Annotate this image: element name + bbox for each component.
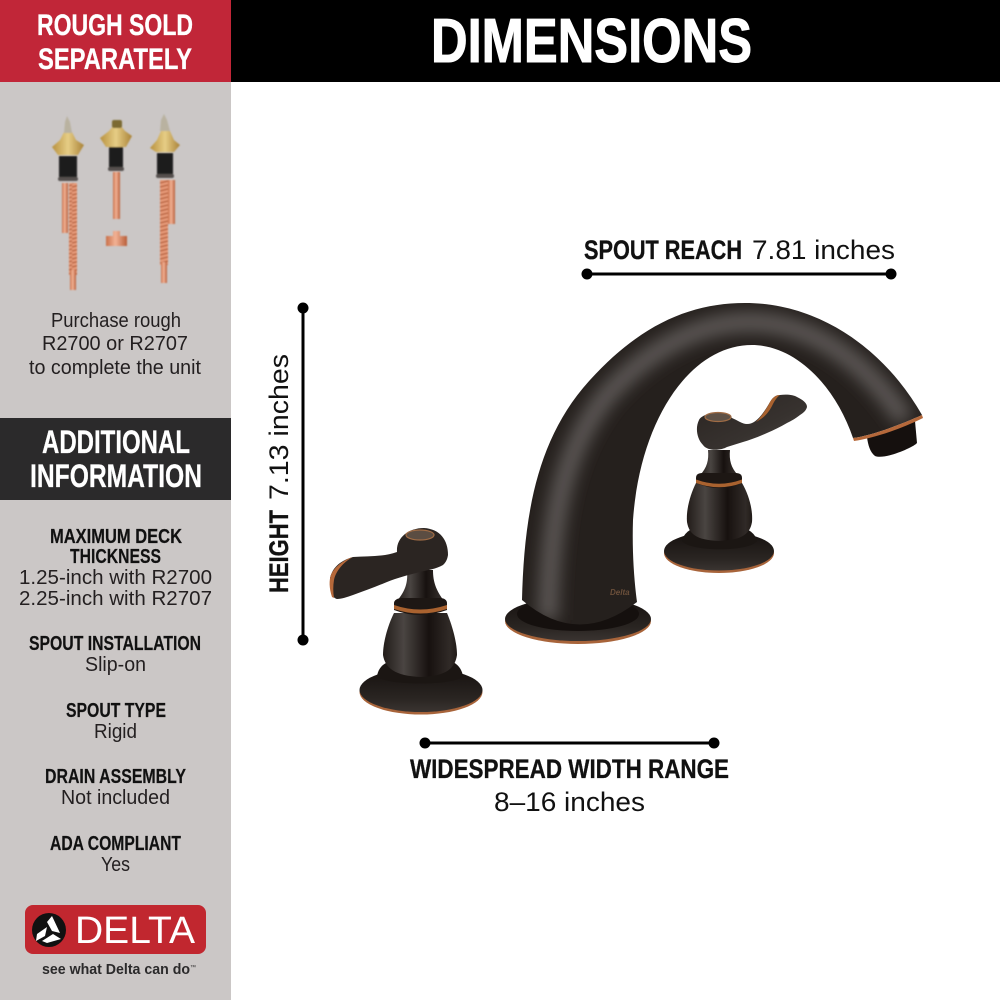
spout reach dimension [582, 235, 896, 280]
spout reach dimension: 7.81 inches [752, 235, 895, 265]
additional information header [0, 418, 231, 500]
purchase rough text: Purchase rough [51, 310, 181, 332]
purchase rough text: to complete the unit [29, 357, 201, 379]
rough valve parts image [52, 114, 180, 290]
spec: spout type: Rigid [94, 721, 137, 743]
red banner: rough sold separately: ROUGH SOLD [37, 9, 193, 42]
left valve [52, 116, 84, 290]
spec: maximum deck thickness: MAXIMUM DECK [50, 526, 182, 548]
left handle [330, 528, 482, 714]
widespread width dimension [410, 738, 729, 817]
additional information header: ADDITIONAL [42, 424, 190, 460]
spec: spout installation [29, 633, 201, 676]
purchase rough text: R2700 or R2707 [42, 333, 188, 355]
red banner: rough sold separately: SEPARATELY [38, 43, 192, 76]
spec: drain assembly [45, 766, 187, 809]
spec: drain assembly: Not included [61, 787, 170, 809]
spec: spout type: SPOUT TYPE [66, 700, 166, 722]
right valve [150, 114, 180, 283]
spec: drain assembly: DRAIN ASSEMBLY [45, 766, 187, 788]
spec: ada compliant: ADA COMPLIANT [50, 833, 181, 855]
middle valve [100, 120, 132, 246]
delta logo: see what Delta can do [42, 961, 190, 978]
right handle [664, 395, 807, 573]
red banner: rough sold separately [0, 0, 231, 82]
spec: maximum deck thickness [19, 526, 212, 610]
additional information header: INFORMATION [30, 458, 202, 494]
height dimension: 7.13 inches [264, 354, 294, 500]
faucet image [330, 303, 923, 714]
left sidebar panel [0, 0, 231, 1000]
spec: maximum deck thickness: 2.25-inch with R2707 [19, 588, 212, 610]
spout: Delta [610, 588, 630, 597]
purchase rough text [29, 310, 201, 379]
height dimension: HEIGHT [264, 510, 294, 593]
spec: spout type [66, 700, 166, 743]
spout reach dimension: SPOUT REACH [584, 235, 742, 265]
delta logo [25, 905, 206, 978]
spec: maximum deck thickness: THICKNESS [70, 546, 161, 568]
spec: spout installation: SPOUT INSTALLATION [29, 633, 201, 655]
spec: ada compliant [50, 833, 181, 876]
spec: ada compliant: Yes [101, 854, 130, 876]
trademark mark: ™ [190, 964, 196, 971]
spec: spout installation: Slip-on [85, 654, 146, 676]
height dimension [264, 302, 308, 646]
spout [505, 303, 923, 644]
title banner: dimensions: DIMENSIONS [431, 7, 752, 76]
spec: maximum deck thickness: 1.25-inch with R2700 [19, 567, 212, 589]
delta logo: DELTA [75, 910, 196, 952]
title banner: dimensions [231, 0, 1000, 82]
widespread width dimension: 8–16 inches [494, 787, 645, 817]
widespread width dimension: WIDESPREAD WIDTH RANGE [410, 754, 729, 784]
